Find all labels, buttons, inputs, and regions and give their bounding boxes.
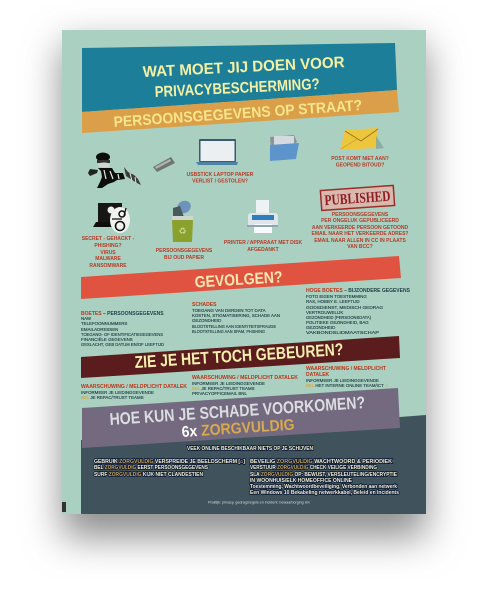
column: schades: BLOOTSTELLING AAN SPAM, PHISHING [192,329,266,334]
footer heading: VEEK ONLINE BESCHIKBAAR NIETS OP JE SCHIJVEN [187,446,313,452]
warning 1: WAARSCHUWING / MELDPLICHT DATALEK [81,384,187,390]
warning 2 [192,375,298,396]
subtitle: PERSOONSGEGEVENS OP STRAAT? [113,97,363,131]
warning 2: PRIVACYOFFICEMAIL BNL [192,391,247,396]
text: old paper [156,248,213,261]
icon: laptop [196,139,238,165]
column: boetes: BOETES – PERSOONSGEGEVENS [81,311,164,317]
title: PRIVACYBESCHERMING? [154,76,320,101]
warning 3: WAARSCHUWING / MELDPLICHT [306,366,386,372]
text: hacked: RANSOMWARE [89,263,127,269]
text: published: AAN VERKEERDE PERSOON GETOOND [312,225,409,231]
footer right tips: BEVEILIG ZORGVULDIG WACHTWOORD & PERIODIEK [250,459,392,465]
column: schades: BLOOTSTELLING AAN IDENTITEITSFRAUDE [192,324,276,329]
see it happen banner [81,336,400,378]
text: printer: AFGEDANKT [247,247,279,253]
footer right tips: SLA ZORGVULDIG OP: BEWUST, VERSLEUTELING/ENCRYPTIE [250,472,398,478]
column: hoge boetes: POLITIEKE GEZINDHEID, BAG [306,320,369,325]
column: hoge boetes: FOTO EIGEN TOESTEMMING [306,294,367,299]
text: old paper: BIJ OUD PAPIER [164,255,204,261]
text: hacked [82,236,135,269]
column: boetes: NAW [81,316,92,321]
icon: published stamp: PUBLISHED [324,189,391,209]
warning 3 [306,366,389,388]
text: published: EMAIL NAAR ALLEN IN CC IN PLAATS [314,238,406,244]
text: hacked: SECRET - GEHACKT - [82,236,135,242]
warning 1: BEL JE REPAC/TRUST TEAMS [81,395,144,400]
icon: recycle bin: ♻ [178,226,187,236]
dark footer panel [81,415,426,514]
footer text [94,446,399,504]
text: published [312,212,409,250]
text: post: GEOPEND BITOUD? [336,162,384,168]
footer right tips: IN WOONHUIS/ELK HOMEOFFICE ONLINE [250,478,353,484]
heading: 6x zorgvuldig: 6x ZORGVULDIG [181,417,295,441]
icon: recycle bin [172,198,193,242]
poster drop shadow [62,45,426,537]
column: hoge boetes: RAS, HOBBY E. LEEFTIJD [306,299,360,304]
column: boetes: TELEFOONNUMMERS [81,321,127,326]
icon: envelope [340,128,384,150]
text: hacked: MALWARE [95,256,121,262]
text: published: EMAIL NAAR HET VERKEERDE ADRES? [312,231,408,237]
icon: usb stick [153,157,175,172]
heading: gevolgen: GEVOLGEN? [194,269,283,291]
icon: hacked laptop [93,203,130,233]
column: boetes: EMAILADRESSEN [81,327,118,332]
footer right tips: VERSTUUR ZORGVULDIG CHECK VEILIGE VERBINDING [250,465,377,471]
text: published: PERSOONSGEGEVENS [332,212,389,218]
column: boetes: GESLACHT, GEB DATUM EN/OF LEEFTIJD [81,342,164,347]
column: schades: SCHADES [192,302,217,308]
column: boetes [81,311,164,347]
column: hoge boetes: GEZONDHEID [306,325,335,330]
warning 2: WAARSCHUWING / MELDPLICHT DATALEK [192,375,298,381]
heading: hoe kun je schade voorkomen: HOE KUN JE SCHADE VOORKOMEN? [109,393,366,429]
title banner [82,43,397,112]
text: post [331,156,389,168]
footer left tips: SURF ZORGVULDIG KIJK NIET CLANDESTIEN [94,472,203,478]
footer left tips: GEBRUIK ZORGVULDIG VERSPREIDE JE BEELDSCHERM [⌂] [94,459,245,465]
icon: printer [247,200,278,233]
text: printer [224,240,303,253]
text: old paper: PERSOONSGEGEVENS [156,248,213,254]
title [142,54,345,101]
footer right tips [250,459,399,496]
column: hoge boetes: VERTROUWELIJK [306,310,343,315]
column: schades: TOEGANG VAN DERDEN TOT DATA [192,308,266,313]
column: hoge boetes: GEZONDHEID (PERSOONSDATA) [306,315,372,320]
warning 3: INFORMEER JE LEIDINGGEVENDE [306,378,379,383]
text: hacked: PHISHING? [94,243,122,249]
text: usb laptop: VERLIST / GESTOLEN? [192,178,248,184]
column: boetes: TOEGANG- OF IDENTIFICATIEGEGEVENS [81,332,163,337]
column: schades: GEZONDHEID [192,318,221,323]
text: published: VAN BCC? [347,244,373,250]
footer left tips: BEL ZORGVULDIG EERST PERSOONSGEGEVENS [94,465,209,471]
warning 2: BEL JE REPAC/TRUST TEAMS [192,386,255,391]
column: hoge boetes: GODSDIENST, MEDISCH GEDRAG [306,305,384,310]
warning 3: DATALEK [306,372,330,378]
text: usb laptop: USBSTICK LAPTOP PAPIER [187,172,254,178]
icon: published stamp [320,185,395,210]
consequences banner [81,256,401,299]
warning 3: BEL HET INTERNE ONLINE TEAM/ICT ✓ [306,383,389,388]
warning 1: INFORMEER JE LEIDINGGEVENDE [81,390,154,395]
text: post: POST KOMT NIET AAN? [331,156,389,162]
column: hoge boetes: HOGE BOETES – BIJZONDERE GEGEVENS [306,288,411,294]
icon: burglar [88,152,141,188]
title: WAT MOET JIJ DOEN VOOR [142,54,345,81]
footer source line: Praktijk: privacy, gedragsregels en incident: bewaarborging klik [208,500,310,504]
text: usb laptop [187,172,254,184]
icon: folder [270,135,299,161]
heading: zie je het toch gebeuren: ZIE JE HET TOCH GEBEUREN? [134,340,344,372]
column: schades [192,302,280,334]
poster [62,30,426,514]
footer left tips [94,459,245,478]
text: hacked: VIRUS [100,250,116,256]
poster background [62,30,426,514]
warning 1 [81,384,187,400]
subtitle banner [82,90,399,133]
text: published: PER ONGELUK GEPUBLICEERD [321,218,399,224]
prevention banner [82,388,400,448]
left edge mark [62,502,66,512]
column: hoge boetes [306,288,411,335]
text: printer: PRINTER / APPARAAT MET DISK [224,240,303,246]
column: hoge boetes: VAKBONDSLIDMAATSCHAP [306,330,379,335]
column: boetes: FINANCIËLE GEGEVENS [81,337,133,342]
footer right tips: Een Windows 10 Bekabeling netwerkkabel, Beleid en Incidents [250,490,399,496]
warning 2: INFORMEER JE LEIDINGGEVENDE [192,381,265,386]
column: schades: KOSTEN, STIGMATISERING, SCHADE AAN [192,313,280,318]
footer right tips: Toestemming, Wachtwoordbeveiliging, Verbonden aan netwerk [250,484,397,490]
